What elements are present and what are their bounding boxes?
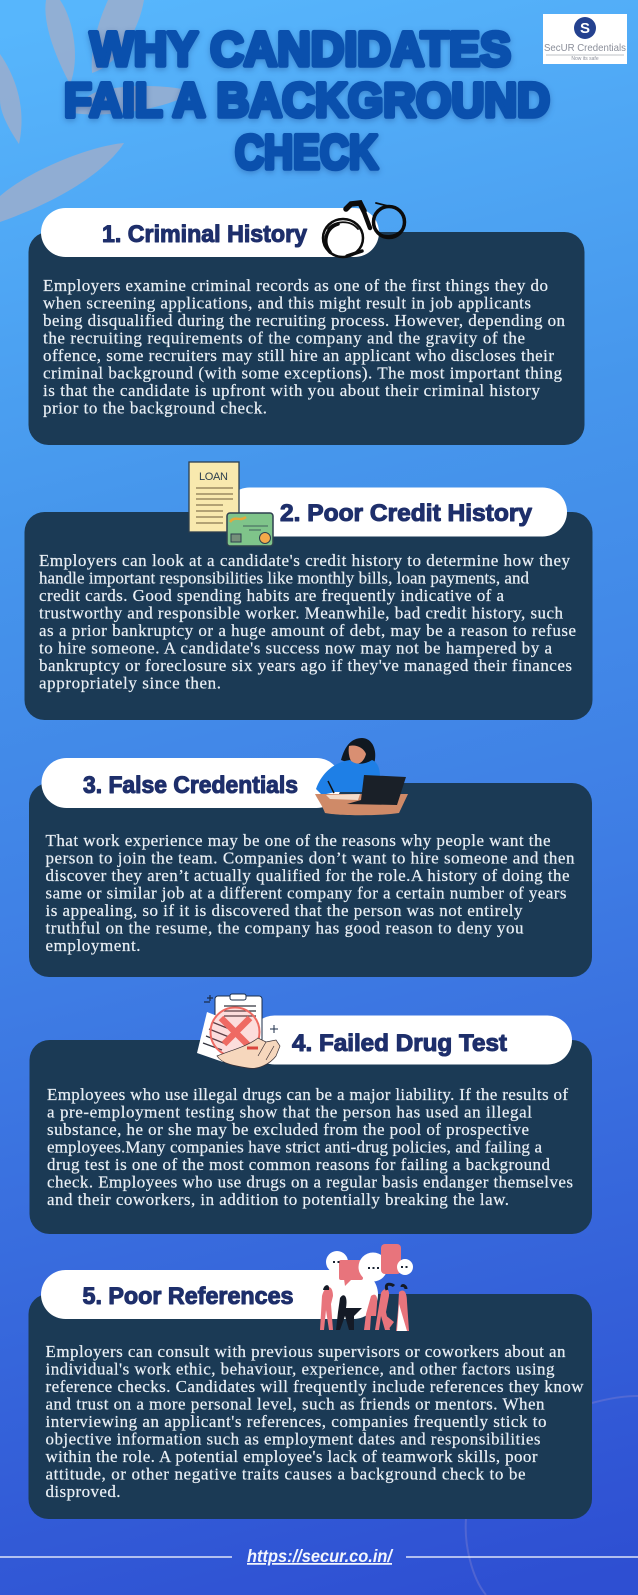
body text: appropriately since then. — [39, 674, 221, 692]
body text: handle important responsibilities like monthly bills, loan payments, and — [39, 568, 530, 588]
body text: bankruptcy or foreclosure six years ago if they've managed their finances — [39, 656, 572, 675]
body text: individual's work ethic, behaviour, experience, and other factors using — [46, 1360, 555, 1378]
logo: SecUR Credentials — [544, 42, 626, 54]
body text: discover they aren’t actually qualified for the role.A history of doing the — [46, 866, 570, 885]
body text: disproved. — [46, 1482, 120, 1501]
body text: prior to the background check. — [43, 398, 267, 418]
heading: 5. Poor References — [82, 1283, 294, 1310]
body text: criminal background (with some exceptions). The most important thing — [43, 364, 562, 382]
body text: employment. — [46, 936, 140, 955]
body text: Employers can consult with previous supervisors or coworkers about an — [46, 1342, 566, 1361]
panel: poor references — [28, 1244, 592, 1519]
icon: loan document and card — [189, 462, 273, 546]
body text: Employers can look at a candidate's credit history to determine how they — [39, 551, 571, 570]
body text: reference checks. Candidates will frequently include references they know — [46, 1377, 584, 1396]
panel background — [28, 232, 584, 445]
body text: offence, some recruiters may still hire an applicant who discloses their — [43, 346, 554, 365]
heading: 2. Poor Credit History — [280, 500, 533, 527]
icon: handcuffs — [323, 203, 404, 257]
body text: Employers examine criminal records as one of the first things they do — [43, 276, 548, 295]
icon: woman at laptop — [315, 738, 408, 815]
heading: 1. Criminal History — [102, 221, 308, 248]
body text: employees.Many companies have strict anti-drug policies, and failing a — [47, 1138, 542, 1156]
decorative arcs — [466, 1396, 638, 1595]
body text — [39, 551, 576, 692]
body text — [46, 831, 575, 955]
body text: drug test is one of the most common reasons for failing a background — [47, 1155, 550, 1174]
heading: 3. False Credentials — [83, 772, 298, 799]
title: CHECK — [235, 126, 378, 180]
body text: and trust on a more personal level, such as friends or mentors. When — [46, 1394, 545, 1414]
panel background — [30, 1040, 592, 1234]
body text: Employees who use illegal drugs can be a major liability. If the results of — [47, 1085, 568, 1104]
body text: check. Employees who use drugs on a regular basis endanger themselves — [47, 1172, 573, 1192]
body text: when screening applications, and this might result in job applicants — [43, 294, 531, 312]
title: FAIL A BACKGROUND — [64, 74, 550, 128]
logo: Now its safe — [571, 56, 599, 62]
panel: poor credit history — [24, 462, 592, 720]
body text: objective information such as employment dates and responsibilities — [46, 1430, 540, 1448]
title: WHY CANDIDATES — [90, 24, 511, 76]
footer link: https://secur.co.in/ — [247, 1546, 394, 1566]
body text — [43, 276, 566, 418]
heading pill — [250, 1016, 572, 1064]
decorative leaves — [0, 0, 194, 222]
panel background — [28, 1294, 592, 1519]
heading pill — [225, 488, 567, 536]
body text: That work experience may be one of the reasons why people want the — [46, 831, 550, 850]
body text: the recruiting requirements of the company and the gravity of the — [43, 328, 525, 348]
body text — [46, 1342, 584, 1501]
panel: criminal history — [28, 203, 584, 445]
logo: S — [580, 20, 590, 37]
body text: within the role. A potential employee's lack of teamwork skills, poor — [46, 1447, 538, 1466]
body text: truthful on the resume, the company has good reason to deny you — [46, 918, 524, 938]
body text: person to join the team. Companies don’t want to hire someone and then — [46, 848, 575, 868]
body text: and their coworkers, in addition to potentially breaking the law. — [47, 1190, 509, 1209]
title — [64, 24, 550, 180]
body text: is that the candidate is upfront with you about their criminal history — [43, 381, 540, 400]
body text: substance, he or she may be excluded from the pool of prospective — [47, 1120, 529, 1139]
panel: failed drug test — [30, 994, 592, 1234]
panel background — [24, 512, 592, 720]
heading pill — [41, 208, 379, 257]
body text: being disqualified during the recruiting process. However, depending on — [43, 311, 566, 330]
logo — [543, 14, 627, 64]
body text: trustworthy and responsible worker. Meanwhile, bad credit history, such — [39, 604, 564, 622]
heading: 4. Failed Drug Test — [292, 1030, 507, 1057]
panel background — [29, 783, 592, 977]
icon: loan document and card: LOAN — [199, 471, 228, 483]
icon: drug test clipboard — [197, 994, 280, 1068]
body text: same or similar job at a different company for a certain number of years — [46, 884, 566, 902]
body text — [47, 1085, 573, 1209]
body text: a pre-employment testing show that the person has used an illegal — [47, 1102, 532, 1122]
heading pill — [42, 758, 342, 808]
icon: people talking with speech bubbles — [320, 1244, 413, 1331]
body text: is appealing, so if it is discovered that the person was not entirely — [46, 901, 523, 920]
body text: credit cards. Good spending habits are frequently indicative of a — [39, 586, 504, 605]
body text: attitude, or other negative traits causes a background check to be — [46, 1464, 526, 1484]
panel: false credentials — [29, 738, 592, 977]
body text: as a prior bankruptcy or a huge amount of debt, may be a reason to refuse — [39, 621, 576, 640]
body text: interviewing an applicant's references, companies frequently stick to — [46, 1412, 546, 1431]
body text: to hire someone. A candidate's success now may not be hampered by a — [39, 638, 552, 658]
heading pill — [41, 1270, 378, 1319]
